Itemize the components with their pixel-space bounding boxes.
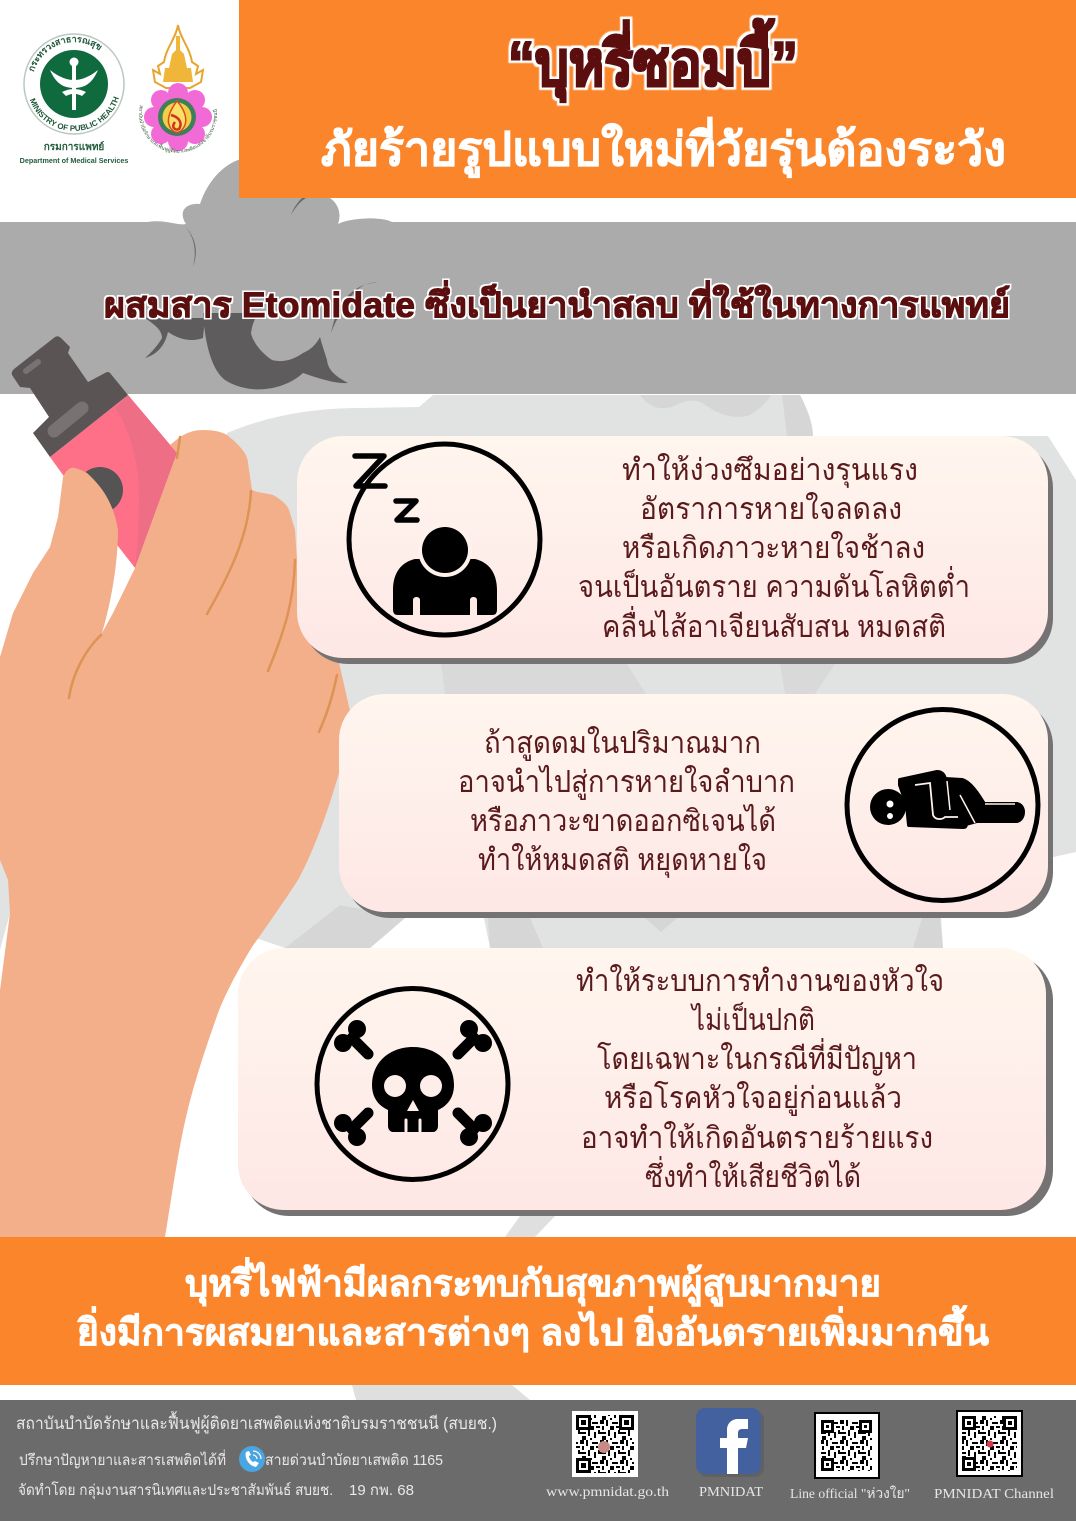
panel text: ทำให้ง่วงซึมอย่างรุนแรง (622, 453, 918, 489)
panel text (458, 726, 795, 879)
logo: ministry of public health: กระทรวงสาธารณสุข (30, 36, 102, 72)
logo: institute: สถาบันบำบัดรักษาและฟื้นฟูผู้ติดยาเสพติดแห่งชาติบรมราชชนนี (139, 106, 217, 154)
logo: ministry of public health: MINISTRY OF PUBLIC HEALTH (30, 96, 119, 131)
logo: ministry of public health (20, 33, 128, 165)
band heading: ผสมสาร Etomidate ซึ่งเป็นยานำสลบ ที่ใช้ในทางการแพทย์ (104, 280, 1010, 325)
title banner (239, 0, 1076, 198)
panel text: อาจทำให้เกิดอันตรายร้ายแรง (581, 1121, 933, 1155)
panel: breathing (339, 694, 1053, 918)
footer: institute name: สถาบันบำบัดรักษาและฟื้นฟูผู้ติดยาเสพติดแห่งชาติบรมราชชนนี (สบยช.) (16, 1411, 497, 1434)
orange warning band: ยิ่งมีการผสมยาและสารต่างๆ ลงไป ยิ่งอันตรายเพิ่มมากขึ้น (77, 1305, 989, 1353)
qr: channel (957, 1411, 1022, 1476)
panel text: อัตราการหายใจลดลง (640, 492, 902, 526)
hand (0, 430, 352, 1237)
logo: institute (139, 24, 217, 154)
footer: date: 19 กพ. 68 (349, 1482, 414, 1499)
footer: hotline: สายด่วนบำบัดยาเสพติด 1165 (265, 1452, 443, 1469)
panel text: หรือภาวะขาดออกซิเจนได้ (470, 803, 776, 838)
panel text: ทำให้หมดสติ หยุดหายใจ (478, 843, 767, 879)
icon: facebook (696, 1408, 764, 1477)
vape device (12, 336, 177, 568)
panel text: โดยเฉพาะในกรณีที่มีปัญหา (597, 1038, 917, 1076)
footer: organiser: จัดทำโดย กลุ่มงานสารนิเทศและประชาสัมพันธ์ สบยช. (18, 1481, 333, 1500)
background smoke (0, 395, 1076, 1400)
footer (0, 1400, 1076, 1521)
panel text (576, 964, 944, 1194)
orange warning band: บุหรี่ไฟฟ้ามีผลกระทบกับสุขภาพผู้สูบมากมาย (185, 1257, 881, 1307)
qr: website (572, 1411, 638, 1477)
panel text: ทำให้ระบบการทำงานของหัวใจ (576, 964, 944, 998)
logo: ministry of public health: Department of Medical Services (20, 156, 128, 165)
qr labels: PMNIDAT (699, 1485, 763, 1500)
panel text: คลื่นไส้อาเจียนสับสน หมดสติ (602, 606, 946, 644)
icon: skull and bones (317, 988, 508, 1180)
panel: drowsiness (297, 436, 1053, 664)
title: “บุหรี่ซอมบี้” (508, 18, 798, 102)
qr labels: Line official "ห่วงใย" (790, 1485, 910, 1502)
icon: phone (239, 1446, 265, 1472)
orange warning band (0, 1237, 1076, 1385)
icon: collapsed person (847, 710, 1038, 900)
panel text: หรือโรคหัวใจอยู่ก่อนแล้ว (604, 1080, 902, 1116)
icon: sleeping person (349, 444, 540, 635)
qr labels: PMNIDAT Channel (934, 1487, 1054, 1502)
panel: heart (238, 948, 1053, 1216)
panel text: หรือเกิดภาวะหายใจช้าลง (622, 531, 925, 565)
grey smoke band (0, 158, 1076, 394)
panel text: จนเป็นอันตราย ความดันโลหิตต่ำ (578, 566, 970, 604)
panel text (578, 453, 970, 644)
footer: consult text: ปรึกษาปัญหายาและสารเสพติดได้ที่ (19, 1449, 226, 1469)
subtitle: ภัยร้ายรูปแบบใหม่ที่วัยรุ่นต้องระวัง (321, 117, 1006, 178)
panel text: ซึ่งทำให้เสียชีวิตได้ (645, 1156, 861, 1194)
panel text: ถ้าสูดดมในปริมาณมาก (484, 726, 761, 761)
panel text: อาจนำไปสู่การหายใจลำบาก (458, 764, 795, 800)
qr: line official (815, 1413, 879, 1478)
qr labels (546, 1485, 1054, 1502)
dark smoke (145, 313, 348, 389)
department name: กรมการแพทย์ (44, 141, 104, 153)
panel text: ไม่เป็นปกติ (690, 1001, 815, 1037)
qr labels: www.pmnidat.go.th (546, 1485, 669, 1500)
